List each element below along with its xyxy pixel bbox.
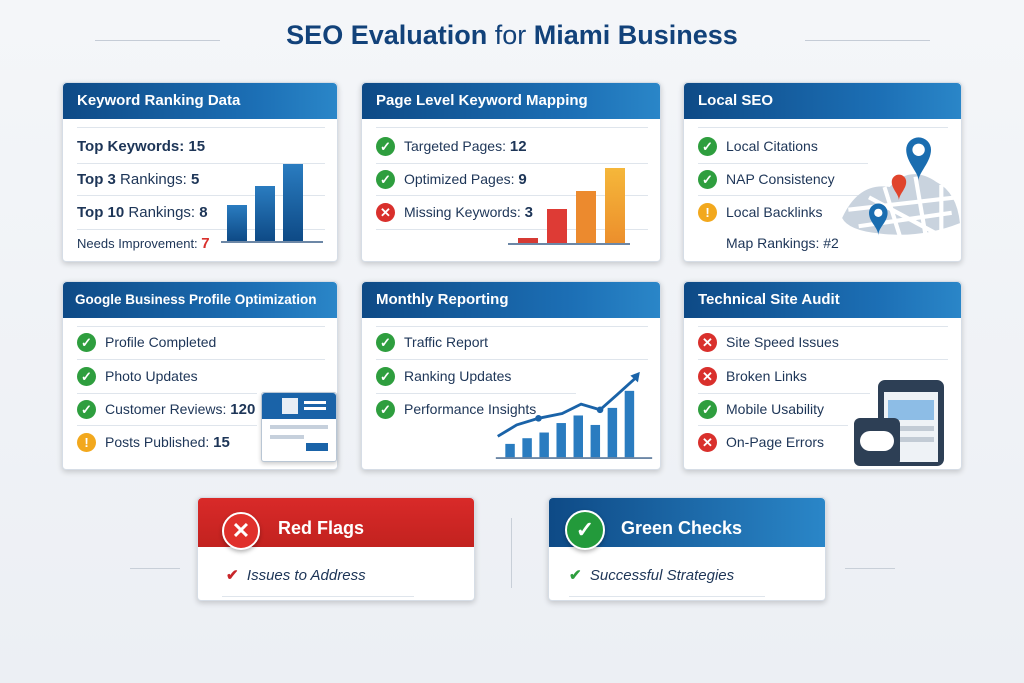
item: posts published: 15 — [213, 434, 230, 450]
item: optimized pages: Optimized Pages: — [404, 171, 514, 187]
item: targeted pages: 12 — [510, 138, 527, 154]
callout: red flags — [197, 497, 475, 601]
item: broken links — [698, 367, 807, 386]
item: broken links: ✕ — [702, 368, 713, 384]
item: profile completed: ✓ — [81, 334, 92, 350]
item: on-page errors: On-Page Errors — [726, 434, 824, 450]
panel: keyword ranking data: Keyword Ranking Data — [77, 92, 240, 109]
text: top 10: Rankings: — [128, 204, 195, 220]
text: top 3: Top 3 — [77, 170, 116, 188]
item: profile completed: Profile Completed — [105, 334, 216, 350]
item: posts published: Posts Published: — [105, 434, 209, 450]
item: photo updates — [77, 367, 198, 386]
item: broken links: Broken Links — [726, 368, 807, 384]
item: nap consistency: NAP Consistency — [726, 171, 835, 187]
item: mobile usability — [698, 400, 824, 419]
item: nap consistency: ✓ — [702, 172, 713, 186]
text: needs improvement: 7 — [201, 234, 210, 252]
item: map rankings: Map Rankings: #2 — [726, 235, 839, 251]
item: posts published — [77, 433, 230, 452]
panel: google business profile: Google Business Profile Optimization — [75, 292, 317, 307]
item: ranking updates: Ranking Updates — [404, 368, 511, 384]
text: top 10: 8 — [199, 204, 208, 220]
item: photo updates: Photo Updates — [105, 368, 198, 384]
item: local backlinks: Local Backlinks — [726, 204, 822, 220]
icon: green check — [565, 510, 605, 550]
panel: local seo: Local SEO — [698, 92, 773, 109]
item: missing keywords: 3 — [525, 204, 533, 220]
item: site speed — [698, 333, 839, 352]
icon: red x: ✕ — [232, 518, 250, 543]
item: on-page errors: ✕ — [702, 434, 713, 450]
panel: page level keyword mapping: Page Level Keyword Mapping — [376, 92, 588, 109]
text: top 10: Top 10 — [77, 204, 124, 220]
panel: google business profile — [62, 281, 338, 470]
item: targeted pages — [376, 137, 527, 156]
item: local citations: Local Citations — [726, 138, 818, 154]
bar chart: blue — [221, 164, 323, 243]
text: top 3: Rankings: — [120, 170, 187, 188]
icon: green check: ✓ — [576, 517, 594, 542]
item: optimized pages — [376, 170, 527, 189]
item: missing keywords: ✕ — [380, 204, 391, 220]
panel: technical site audit — [683, 281, 962, 470]
text: top 3: 5 — [191, 170, 199, 188]
item: local backlinks — [698, 203, 822, 222]
item: missing keywords: Missing Keywords: — [404, 204, 521, 220]
item: profile completed — [77, 333, 216, 352]
item: mobile usability: Mobile Usability — [726, 401, 824, 417]
item: performance insights: ✓ — [380, 402, 391, 416]
text: successful strategies: ✔ Successful Strategies — [569, 567, 734, 584]
icon: red x — [222, 512, 260, 550]
item: optimized pages: 9 — [518, 170, 527, 188]
item: missing keywords — [376, 203, 533, 222]
item: traffic report: Traffic Report — [404, 334, 488, 350]
item: optimized pages: ✓ — [380, 172, 391, 186]
panel: keyword ranking data — [62, 82, 338, 262]
callout: green checks: Green Checks — [621, 518, 742, 538]
panel: technical site audit: Technical Site Audit — [698, 291, 840, 308]
item: photo updates: ✓ — [81, 368, 92, 384]
text: needs improvement: Needs Improvement: — [77, 236, 198, 250]
item: site speed: Site Speed Issues — [726, 334, 839, 350]
item: local citations: ✓ — [702, 138, 713, 154]
icon: profile card — [261, 392, 337, 462]
item: customer reviews: Customer Reviews: — [105, 401, 226, 417]
item: local backlinks: ! — [705, 204, 710, 220]
item: ranking updates — [376, 367, 511, 386]
item: traffic report — [376, 333, 488, 352]
item: performance insights — [376, 400, 536, 419]
bar chart: red-orange — [508, 168, 630, 245]
panel: page level keyword mapping — [361, 82, 661, 262]
item: targeted pages: ✓ — [380, 138, 391, 154]
item: mobile usability: ✓ — [702, 402, 713, 416]
item: on-page errors — [698, 433, 824, 452]
chart: growth line with bars — [496, 372, 652, 459]
item: site speed: ✕ — [702, 334, 713, 350]
callout: red flags: Red Flags — [278, 518, 364, 538]
title: SEO Evaluation for Miami Business — [286, 20, 738, 50]
panel: local seo — [683, 82, 962, 262]
icon: map with pins — [842, 137, 960, 236]
item: performance insights: Performance Insights — [404, 401, 536, 417]
panel: monthly reporting: Monthly Reporting — [376, 291, 508, 308]
icon: devices — [854, 380, 944, 466]
item: targeted pages: Targeted Pages: — [404, 138, 506, 154]
item: customer reviews: ✓ — [81, 402, 92, 416]
text: issues: ✔ Issues to Address — [226, 567, 366, 584]
item: local citations — [698, 137, 818, 156]
item: nap consistency — [698, 170, 835, 189]
callout: green checks — [548, 497, 826, 601]
item: posts published: ! — [84, 434, 89, 450]
item: traffic report: ✓ — [380, 334, 391, 350]
item: ranking updates: ✓ — [380, 368, 391, 384]
item: customer reviews: 120 — [230, 400, 255, 418]
panel: monthly reporting — [361, 281, 661, 470]
text: top keywords: Top Keywords: 15 — [77, 138, 205, 154]
text: top 3 — [77, 170, 199, 188]
item: customer reviews — [77, 400, 255, 419]
text: top 10 — [77, 204, 208, 220]
